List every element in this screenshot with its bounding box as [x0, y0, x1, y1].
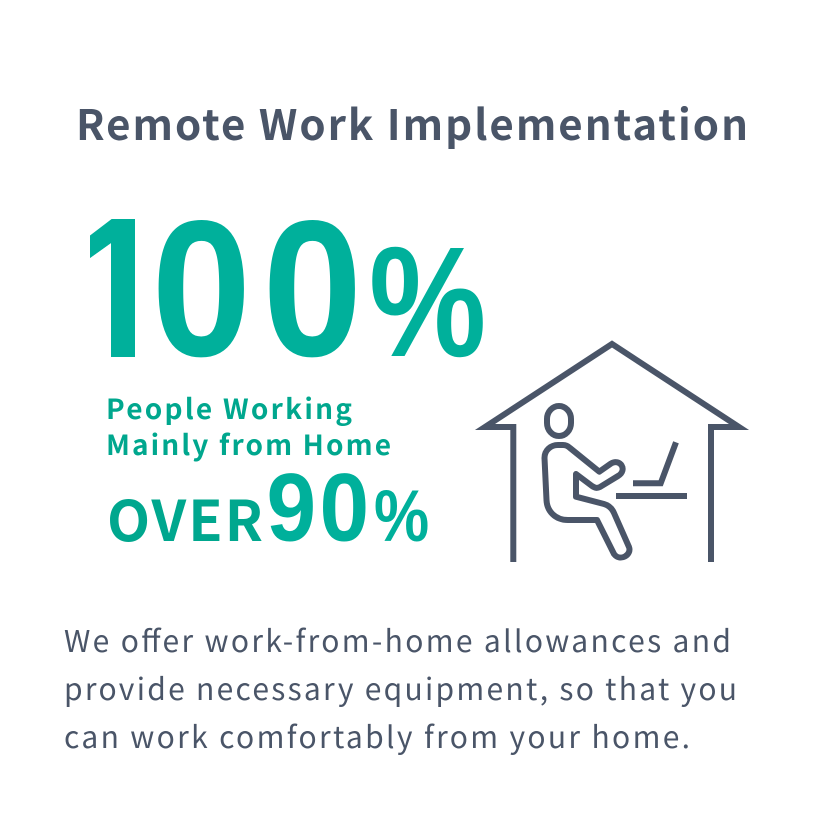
title: Remote Work Implementation — [76, 92, 748, 153]
big statistic: 100%: 1 — [72, 178, 165, 399]
icon: laptop — [633, 442, 676, 483]
body text: provide necessary equipment, so that you — [64, 665, 737, 709]
icon: house outline — [485, 344, 739, 562]
icon: head — [547, 406, 571, 436]
body text — [64, 617, 737, 757]
icon: body — [544, 445, 629, 558]
statistic: over 90% — [107, 453, 429, 561]
statistic: over 90%: % — [374, 476, 429, 557]
icon: desk — [616, 493, 687, 499]
big statistic: 100%: 0 — [152, 180, 251, 397]
body text: can work comfortably from your home. — [64, 713, 690, 757]
big statistic: 100%: % — [369, 214, 486, 390]
label: people working mainly from home: Mainly from Home — [106, 424, 391, 464]
body text: We offer work-from-home allowances and — [64, 617, 731, 661]
big statistic: 100% — [90, 219, 483, 358]
statistic: over 90%: 0 — [320, 453, 369, 561]
label: people working mainly from home — [106, 388, 391, 464]
icon: person working on a laptop at home — [485, 344, 739, 562]
statistic: over 90%: OVER — [107, 477, 263, 558]
label: people working mainly from home: People Working — [106, 388, 352, 428]
big statistic: 100%: 0 — [262, 180, 362, 397]
statistic: over 90%: 9 — [266, 453, 316, 561]
